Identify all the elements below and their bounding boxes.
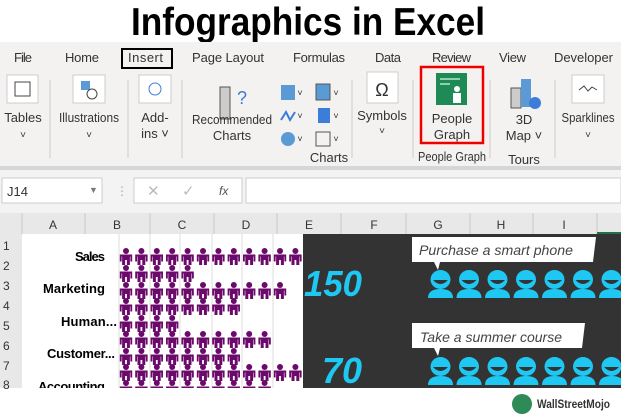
column headers: A (49, 218, 57, 232)
tabs: Home (65, 50, 99, 65)
blue people row 1 (428, 270, 621, 298)
formula bar: ✓ (182, 183, 195, 200)
ribbon (0, 42, 621, 170)
3d map: Tours (508, 152, 540, 167)
chart type icons: ˅ (333, 88, 339, 98)
sparklines: Sparklines (562, 110, 615, 125)
number 70: 70 (322, 350, 362, 391)
dark panel: survey people graph (303, 234, 621, 391)
row headers (0, 234, 22, 392)
tabs: View (499, 50, 527, 65)
tables: Tables (4, 110, 42, 125)
title: Infographics in Excel (131, 1, 485, 44)
people graph: departments: Marketing (43, 281, 105, 296)
purple person rows (120, 248, 302, 397)
formula bar (0, 170, 621, 213)
column headers: F (370, 218, 378, 232)
sparklines (562, 75, 615, 141)
number 150: 150 (304, 263, 362, 304)
people graph button: People (432, 111, 472, 126)
callout: summer course: Take a summer course (420, 329, 562, 345)
blue people row 2 (428, 357, 621, 385)
row headers: 8 (3, 378, 10, 392)
tabs: Formulas (293, 50, 346, 65)
chart type icons: ˅ (297, 111, 303, 121)
callout: summer course (412, 323, 585, 356)
formula bar: J14 (7, 184, 28, 199)
column headers: G (433, 218, 443, 232)
tabs: Review (432, 50, 472, 65)
add-ins: Add- (141, 110, 169, 125)
logo (512, 394, 610, 414)
chart type icons: Charts (310, 150, 349, 165)
row headers: 6 (3, 339, 10, 353)
people graph: departments: Sales (75, 249, 105, 264)
row headers: 5 (3, 319, 10, 333)
3d map: 3D (516, 112, 532, 127)
insert tab highlight (122, 49, 172, 68)
illustrations: Illustrations (59, 110, 119, 125)
chart type icons: ˅ (297, 88, 303, 98)
chart type icons: ˅ (333, 134, 339, 144)
row headers: 3 (3, 279, 10, 293)
people graph: departments: Customer... (47, 346, 115, 361)
row headers: 1 (3, 239, 10, 253)
logo: WallStreetMojo (537, 397, 610, 411)
recommended charts (192, 87, 272, 143)
illustrations: ˅ (86, 130, 92, 141)
add-ins: ins ˅ (141, 126, 169, 141)
tabs: Data (375, 50, 402, 65)
add-ins (139, 75, 171, 141)
tabs (14, 50, 614, 65)
recommended charts: Charts (213, 128, 252, 143)
row headers: 4 (3, 299, 10, 313)
chart type icons: ˅ (333, 111, 339, 121)
symbols (357, 72, 407, 137)
people graph: departments: Accounting (38, 379, 105, 394)
formula bar: ⋮ (116, 184, 128, 198)
column headers: E (305, 218, 313, 232)
tabs: File (14, 50, 32, 65)
tabs: Insert (128, 50, 163, 65)
formula bar: fx (219, 184, 229, 198)
tabs: Page Layout (192, 50, 264, 65)
column headers: D (242, 218, 251, 232)
people graph button: People Graph (418, 149, 486, 164)
sparklines: ˅ (585, 130, 591, 141)
symbols: Ω (375, 80, 389, 100)
3d map (506, 79, 542, 167)
column headers: H (497, 218, 505, 232)
people graph button (418, 67, 486, 164)
people graph button: Graph (434, 127, 470, 142)
tables: ˅ (20, 130, 26, 141)
chart type icons: ˅ (297, 134, 303, 144)
recommended charts: Recommended (192, 112, 272, 127)
callout: smart phone: Purchase a smart phone (419, 242, 573, 258)
formula bar: ▼ (89, 185, 98, 195)
recommended charts: ? (237, 88, 247, 108)
chart type icons (281, 84, 349, 165)
column headers: B (113, 218, 121, 232)
row headers: 7 (3, 359, 10, 373)
row headers: 2 (3, 259, 10, 273)
illustrations (59, 75, 119, 141)
column headers: I (562, 218, 566, 232)
formula bar: ✕ (147, 183, 160, 200)
callout: smart phone (412, 237, 596, 270)
people graph: departments (38, 234, 302, 397)
column headers (0, 213, 621, 234)
tables (4, 75, 42, 141)
symbols: ˅ (379, 126, 385, 137)
tabs: Developer (554, 50, 614, 65)
symbols: Symbols (357, 108, 407, 123)
people graph: departments: Human... (61, 314, 117, 329)
3d map: Map ˅ (506, 128, 542, 143)
column headers: C (178, 218, 187, 232)
ribbon buttons (4, 67, 615, 167)
